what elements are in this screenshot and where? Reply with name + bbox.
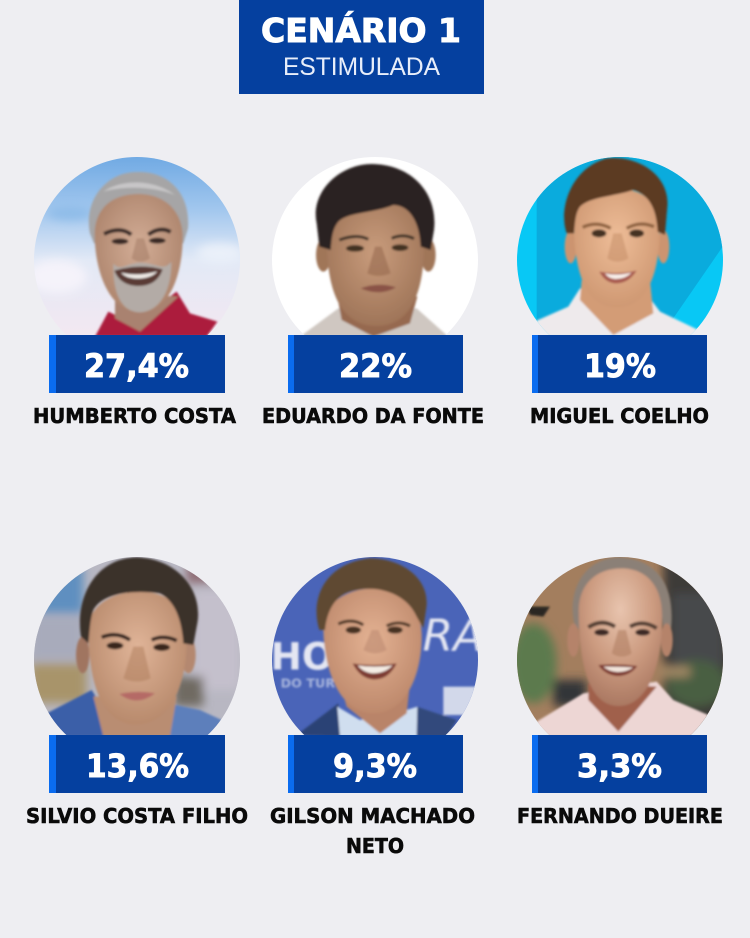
panel: Eduardo da Fonte <box>263 157 483 424</box>
panel: Fernando Dueire <box>517 557 723 824</box>
portrait: Gilson Machado Neto: HO <box>271 634 334 678</box>
candidate name <box>270 804 475 858</box>
candidate name: HUMBERTO COSTA <box>33 404 236 428</box>
candidate name: NETO <box>346 834 404 858</box>
value: 13,6% <box>86 747 189 785</box>
value: 3,3% <box>577 747 662 785</box>
portrait: Humberto Costa <box>34 157 240 335</box>
subheading: Estimulada: ESTIMULADA <box>283 53 440 81</box>
percentage bar <box>49 735 225 793</box>
percentage bar <box>532 335 707 393</box>
candidate name: SILVIO COSTA FILHO <box>26 804 248 828</box>
portrait: Miguel Coelho <box>517 157 723 335</box>
candidate name: GILSON MACHADO <box>270 804 475 828</box>
candidate name: FERNANDO DUEIRE <box>517 804 723 828</box>
portrait: Eduardo da Fonte <box>272 157 478 335</box>
panel: Humberto Costa <box>34 157 240 424</box>
portrait: Silvio Costa Filho <box>34 557 240 735</box>
candidate name: MIGUEL COELHO <box>530 404 709 428</box>
value: 9,3% <box>333 747 417 785</box>
panel: Miguel Coelho <box>517 157 723 424</box>
heading: Cenário 1: CENÁRIO 1 <box>261 10 461 50</box>
percentage bar <box>288 335 463 393</box>
percentage bar <box>49 335 225 393</box>
panel: Gilson Machado Neto <box>270 557 478 854</box>
portrait: Gilson Machado Neto: DO TUR <box>281 675 335 690</box>
candidate name: EDUARDO DA FONTE <box>262 404 484 428</box>
portrait: Fernando Dueire <box>517 557 723 735</box>
value: 27,4% <box>84 347 189 385</box>
portrait: Gilson Machado Neto: RA <box>423 611 483 662</box>
value: 19% <box>584 347 656 385</box>
panel: Silvio Costa Filho <box>27 557 248 824</box>
portrait: Gilson Machado Neto <box>272 557 478 735</box>
value: 22% <box>339 347 412 385</box>
percentage bar <box>288 735 463 793</box>
percentage bar <box>532 735 707 793</box>
title banner <box>239 0 484 94</box>
